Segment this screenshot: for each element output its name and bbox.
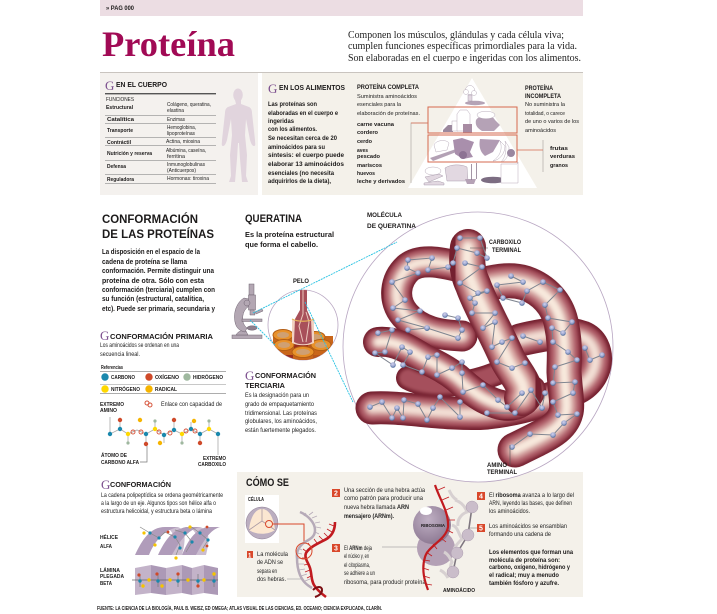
legend: referencias: HIDRÓGENO <box>193 373 224 381</box>
label: molécula de queratina: DE QUERATINA <box>367 223 417 230</box>
header band <box>100 0 583 16</box>
text: proteína completa: elaboración de proteínas. <box>357 111 420 117</box>
step 5: Los aminoácidos se ensamblan <box>489 524 567 530</box>
heading: conformación: CONFORMACIÓN <box>110 480 171 489</box>
step 4: ARN, leyendo las bases, que definen <box>489 501 572 507</box>
text: proteínas en alimentos: síntesis: el cuerpo puede <box>268 152 345 159</box>
callout lines: zoom <box>250 242 397 402</box>
food: lacteos y carnes <box>443 110 500 133</box>
label: molécula de queratina <box>367 211 417 230</box>
text: elementos: el radical; muy a menudo <box>489 572 559 579</box>
intro text: Componen los músculos, glándulas y cada célula viva; <box>348 30 564 41</box>
label: amino terminal <box>487 445 517 476</box>
section: conformación de las proteínas: etc). Puede ser primaria, secundaria y <box>102 306 215 313</box>
food: pan y granos <box>424 162 518 185</box>
step 1: de ADN se <box>257 560 284 566</box>
label: extremo amino <box>100 402 125 414</box>
text: proteínas en alimentos: aminoácidos para su <box>268 144 325 151</box>
section: conformación terciaria: grado de empaquetamiento <box>245 402 315 408</box>
text: proteínas en alimentos: elaborar 13 aminoácidos <box>268 161 345 168</box>
section: conformación secundaria: La cadena polipeptídica se ordena geométricamente <box>101 493 224 499</box>
step 5: formando una cadena de <box>489 532 552 538</box>
text: elementos: carbono, oxígeno, hidrógeno y <box>489 564 570 571</box>
diagram: hélice alfa <box>135 525 220 560</box>
table: funciones: Reguladora <box>107 177 135 183</box>
table: funciones: Nutrición y reserva <box>107 151 153 157</box>
step 3: el citoplasma, <box>344 563 370 569</box>
section: conformación de las proteínas: cadena de proteína se llama <box>102 259 187 266</box>
text: elementos: Los elementos que forman una <box>489 549 574 556</box>
heading: en el cuerpo: EN EL CUERPO <box>116 80 167 89</box>
step 4: 4 <box>479 494 483 500</box>
table: funciones: Contráctil <box>107 140 131 146</box>
section: queratina text: QUERATINA <box>245 213 302 225</box>
molecule: keratin tubes <box>372 247 596 450</box>
section: queratina text: Es la proteína estructural <box>245 230 334 239</box>
molecule: amino acid chains <box>370 238 602 447</box>
table: funciones: Defensa <box>107 164 127 170</box>
step 4: los aminoácidos. <box>489 509 530 515</box>
diagram: lámina plegada beta <box>132 565 218 595</box>
hair: small circle <box>268 290 338 362</box>
step 3: El ARNm deja <box>344 546 372 552</box>
label: hélice alfa <box>100 533 118 550</box>
text: proteína completa: PROTEÍNA COMPLETA <box>357 83 419 91</box>
text: proteína incompleta <box>525 84 579 169</box>
label: amino terminal: TERMINAL <box>487 470 517 476</box>
section: conformación secundaria <box>100 477 224 595</box>
text: proteína completa: pescado <box>357 154 380 160</box>
header band: » PAG 000 <box>106 5 134 12</box>
diagram: ribosoma <box>413 485 478 590</box>
legend: referencias: CARBONO <box>111 375 136 381</box>
text: proteína completa <box>357 83 420 185</box>
text: proteínas en alimentos: con los alimentos. <box>268 126 317 133</box>
legend: referencias: OXÍGENO <box>155 373 180 381</box>
text: proteínas en alimentos: esenciales (no necesita <box>268 170 335 177</box>
table: funciones: Enzimas <box>167 117 185 123</box>
text: proteínas en alimentos: ingeridas <box>268 118 295 125</box>
section: conformación primaria <box>100 328 227 468</box>
heading: conformación primaria: CONFORMACIÓN PRIMARIA <box>110 332 214 341</box>
heading: cómo se: CÓMO SE <box>246 476 289 489</box>
intro text: cumplen funciones específicas primordiales para la vida. <box>348 41 577 52</box>
heading: conformación <box>101 477 171 492</box>
text: proteína completa: leche y derivados <box>357 179 405 185</box>
step 1: dos hebras. <box>257 577 286 583</box>
text: proteína completa: esenciales para la <box>357 102 402 108</box>
text: proteína incompleta: No suministra la <box>525 102 566 108</box>
section: conformación terciaria: TERCIARIA <box>245 381 286 390</box>
step 1 <box>247 551 302 583</box>
section: conformación secundaria: a la largo de un eje. Algunos tipos son hélice alfa o <box>101 501 217 507</box>
table: funciones: lipoproteínas <box>167 131 195 137</box>
section: conformación terciaria: CONFORMACIÓN <box>255 371 316 380</box>
step 1: separa en <box>257 569 277 575</box>
label: átomo de carbono alfa: ÁTOMO DE <box>101 452 127 459</box>
text: proteína incompleta: verduras <box>550 154 575 160</box>
text: proteína incompleta: totalidad, o carece <box>525 111 565 117</box>
label: lámina plegada beta: PLEGADA <box>100 574 124 580</box>
table: funciones: Transporte <box>107 128 133 134</box>
step 3: ribosoma, para producir proteína. <box>344 580 427 586</box>
heading: en los alimentos: EN LOS ALIMENTOS <box>279 83 345 92</box>
icon: human body <box>222 88 255 182</box>
text: proteína incompleta: frutas <box>550 146 568 152</box>
label: lámina plegada beta: LÁMINA <box>100 567 120 574</box>
text: proteína completa: huevos <box>357 171 375 177</box>
heading: en los alimentos: G <box>268 81 277 96</box>
text: proteínas en alimentos: Las proteínas son <box>268 101 317 108</box>
step 4 <box>477 492 574 515</box>
table: funciones: Estructural <box>106 105 133 111</box>
step 2: nueva hebra llamada ARN <box>344 505 409 511</box>
legend: referencias: RADICAL <box>155 387 178 393</box>
label: amino terminal: AMINO <box>487 463 507 469</box>
icon: célula <box>245 495 279 543</box>
tube right loop <box>490 281 567 450</box>
step 2: como patrón para producir una <box>344 496 424 502</box>
icon: food pyramid <box>408 78 537 188</box>
step 1: 1 <box>248 554 252 560</box>
table: funciones: Albúmina, caseína, <box>166 148 206 154</box>
section: conformación de las proteínas: DE LAS PROTEÍNAS <box>102 226 214 241</box>
step 2: Una sección de una hebra actúa <box>344 488 426 494</box>
table: funciones: Actina, miosina <box>166 139 201 145</box>
section: conformación de las proteínas: su función (estructural, catalítica, <box>102 296 204 303</box>
step 3: 3 <box>334 546 338 552</box>
section: conformación primaria: Los aminoácidos se ordenan en una <box>100 343 180 349</box>
text: proteína incompleta: INCOMPLETA <box>525 93 561 100</box>
text: proteína completa: cordero <box>357 130 378 136</box>
connector: lista completa <box>411 123 428 183</box>
label: átomo de carbono alfa <box>101 446 147 466</box>
step 5: 5 <box>479 526 483 532</box>
section: conformación de las proteínas: conformación. Permite distinguir una <box>102 268 214 275</box>
label: extremo carboxilo: CARBOXILO <box>198 462 227 468</box>
text: elementos: molécula de proteína son: <box>489 557 560 564</box>
source: FUENTE: LA CIENCIA DE LA BIOLOGÍA, PAUL B. WEISZ, ED OMEGA; ATLAS VISUAL DE LAS CIENCIAS, ED. OCEANO; CIENCIA EXPLICADA, CLARÍN. <box>97 604 382 612</box>
table: funciones: elastina <box>167 108 185 114</box>
label: extremo carboxilo <box>198 456 227 468</box>
label: átomo de carbono alfa: CARBONO ALFA <box>101 460 139 466</box>
label: carboxilo terminal <box>470 240 521 254</box>
label: molécula de queratina: MOLÉCULA <box>367 211 403 219</box>
section: queratina text <box>245 213 334 249</box>
table: funciones: Hormonas: tiroxina <box>167 176 210 182</box>
tube left front <box>378 342 531 406</box>
legend: referencias: NITRÓGENO <box>111 385 141 393</box>
text: elementos <box>489 549 574 587</box>
section: queratina text: que forma el cabello. <box>245 240 318 249</box>
label: extremo amino: EXTREMO <box>100 402 125 408</box>
section: conformación terciaria: globulares, los aminoácidos, <box>245 419 317 425</box>
section: conformación terciaria: Es la designación para un <box>245 393 309 399</box>
text: proteínas en alimentos: elaboradas en el cuerpo e <box>268 110 339 117</box>
section: conformación de las proteínas: CONFORMACIÓN <box>102 211 198 226</box>
diagram: ribosoma: RIBOSOMA <box>421 523 445 529</box>
text: elementos: también fósforo y azufre. <box>489 580 559 587</box>
step 2: 2 <box>334 490 338 498</box>
panel: en el cuerpo <box>100 73 258 195</box>
panel: cómo se <box>245 445 574 597</box>
intro text: Son elaboradas en el cuerpo e ingeridas con los alimentos. <box>348 53 581 64</box>
legend: referencias <box>100 365 226 394</box>
heading: conformación primaria: G <box>100 328 109 343</box>
section: conformación terciaria <box>245 368 317 434</box>
text: proteína completa: Suministra aminoácidos <box>357 94 417 100</box>
text: proteína completa: cerdo <box>357 139 372 145</box>
panel: en los alimentos <box>262 73 583 195</box>
text: proteína incompleta: de uno o varios de los <box>525 119 579 125</box>
label: carboxilo terminal: TERMINAL <box>492 248 521 254</box>
title: Proteína <box>102 24 235 64</box>
heading: conformación primaria <box>100 328 214 343</box>
text: proteína completa: carne vacuna <box>357 122 395 128</box>
step 3: el núcleo y, en <box>344 554 369 560</box>
step 2: mensajero (ARNm). <box>344 514 394 520</box>
table: funciones: Catalítica <box>107 117 135 123</box>
section: conformación de las proteínas: La disposición en el espacio de la <box>102 249 200 256</box>
icon: célula: CÉLULA <box>248 495 264 503</box>
label: enlace: Enlace con capacidad de <box>161 402 223 408</box>
diagram: ADN <box>296 512 335 597</box>
legend: referencias: Referencias <box>101 365 123 371</box>
step 5 <box>468 524 567 538</box>
table: funciones: (Anticuerpos) <box>167 168 196 174</box>
text: proteínas en alimentos: Se necesitan cerca de 20 <box>268 135 338 142</box>
label: extremo amino: AMINO <box>100 408 118 414</box>
heading: en los alimentos <box>268 81 345 96</box>
table: funciones: ferritina <box>167 154 186 160</box>
text: proteína incompleta: aminoácidos <box>525 128 556 134</box>
step 3: se adhiere a un <box>344 571 375 577</box>
section: conformación terciaria: G <box>245 368 254 383</box>
step 2 <box>332 488 426 520</box>
label: extremo carboxilo: EXTREMO <box>203 456 227 462</box>
label: carboxilo terminal: CARBOXILO <box>489 240 521 246</box>
label: pelo: PELO <box>293 279 309 285</box>
text: proteína incompleta: PROTEÍNA <box>525 84 553 92</box>
icon: microscope <box>232 284 263 338</box>
label: lámina plegada beta: BETA <box>100 581 112 587</box>
connector: lista incompleta <box>542 140 544 172</box>
section: conformación secundaria: estructura helicoidal, y estructura beta o lámina <box>101 509 213 515</box>
follicle tubes <box>273 330 334 362</box>
text: proteínas en alimentos: adquirirlos de la dieta), <box>268 178 331 185</box>
table: funciones <box>105 97 216 184</box>
section: conformación primaria: secuencia lineal. <box>100 352 140 358</box>
food: top <box>464 86 485 105</box>
label: hélice alfa: ALFA <box>100 544 112 550</box>
step 3 <box>332 544 427 586</box>
intro text <box>348 30 581 64</box>
step 4: El ribosoma avanza a lo largo del <box>489 493 574 499</box>
section: conformación de las proteínas: conformación (terciaria) cumplen con <box>102 287 215 294</box>
tube back <box>372 334 596 414</box>
label: hélice alfa: HÉLICE <box>100 533 118 541</box>
heading: en el cuerpo <box>105 78 167 93</box>
table: funciones: FUNCIONES <box>106 97 134 103</box>
label: aminoácido: AMINOÁCIDO <box>443 587 476 594</box>
food: frutas y verduras <box>430 138 515 162</box>
big molecule circle <box>343 212 613 482</box>
section: conformación de las proteínas <box>102 211 215 313</box>
section: conformación de las proteínas: proteína de otra. Sólo con esta <box>102 278 204 285</box>
text: proteína completa: aves <box>357 148 368 154</box>
table: funciones: Inmunoglobulinas <box>167 162 205 168</box>
chart: cadena de aminoácidos <box>108 417 220 455</box>
text: proteína completa: mariscos <box>357 163 382 169</box>
label: lámina plegada beta <box>100 567 124 587</box>
text: proteínas en alimentos <box>268 101 345 185</box>
tube upper left loop <box>397 262 462 336</box>
section: conformación terciaria: están fuertemente plegados. <box>245 428 316 434</box>
text: proteína incompleta: granos <box>550 163 568 169</box>
tube central front <box>467 247 524 398</box>
panel: cómo se background <box>237 472 583 597</box>
section: conformación terciaria: tridimensional. Las proteínas <box>245 411 317 417</box>
step 1: La molécula <box>257 552 289 558</box>
heading: en el cuerpo: G <box>105 78 114 93</box>
trna <box>440 490 467 578</box>
connector: núcleo a ADN <box>272 524 304 544</box>
table: funciones: Hemoglobina, <box>167 125 196 131</box>
heading: conformación: G <box>101 477 110 492</box>
table: funciones: Colágeno, queratina, <box>167 102 211 108</box>
